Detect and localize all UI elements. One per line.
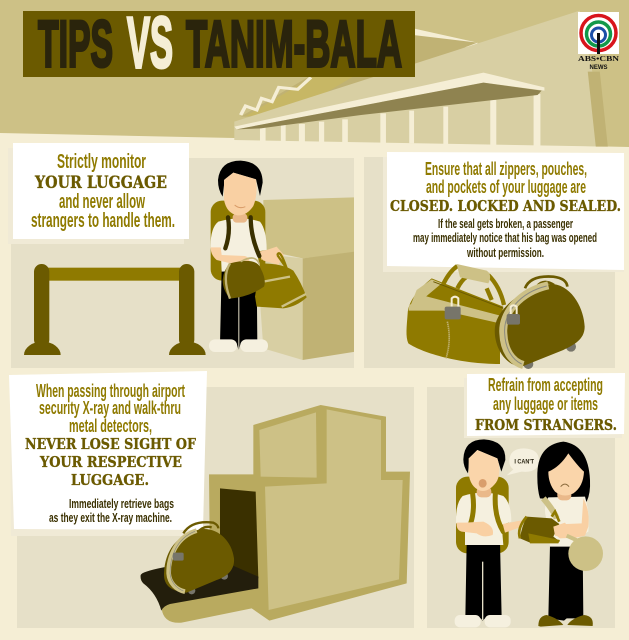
callout: zippers and pouches: without permission. [466, 245, 544, 260]
callout: monitor luggage: strangers to handle them. [31, 210, 175, 232]
traveller refusing [455, 439, 523, 627]
handbag [520, 517, 560, 543]
title banner: VS [127, 4, 173, 84]
callout: monitor luggage: YOUR LUGGAGE [34, 173, 167, 193]
suitcase on belt [164, 522, 234, 594]
callout: x-ray security: Immediately retrieve bags [69, 496, 174, 511]
round bag [223, 261, 265, 299]
callout: x-ray security: as they exit the X-ray machine. [49, 510, 172, 525]
title banner [23, 4, 415, 84]
callout: x-ray security: metal detectors, [69, 416, 152, 436]
duffel bag with padlock [406, 264, 504, 364]
conveyor belt [141, 560, 258, 611]
title banner: TANIM-BALA [186, 6, 402, 80]
round suitcase with padlock [495, 276, 585, 369]
panel: x-ray machine [17, 387, 414, 628]
ABS-CBN News logo [578, 12, 620, 71]
columns [260, 94, 540, 146]
shoulder bag [567, 536, 580, 542]
callout: monitor luggage [8, 143, 189, 244]
traveller woman with handbag [519, 442, 603, 627]
callout: x-ray security: NEVER LOSE SIGHT OF [25, 435, 196, 453]
roof zigzag [241, 77, 311, 115]
callout: x-ray security: YOUR RESPECTIVE [39, 453, 182, 471]
airport terminal illustration [234, 11, 608, 147]
callout: monitor luggage: Strictly monitor [57, 151, 146, 173]
title banner: TIPS [38, 6, 113, 80]
traveller with backpack [209, 161, 307, 352]
callout: x-ray security: security X-ray and walk-thru [39, 398, 181, 418]
duffel bag [262, 253, 287, 269]
panel: closed locked and sealed [364, 157, 615, 368]
panel: strangers [427, 387, 615, 628]
locked luggage illustration [406, 264, 585, 369]
header backdrop [0, 0, 629, 147]
stanchion barrier [24, 264, 206, 355]
callout: x-ray security: When passing through airport [36, 381, 185, 401]
speech bubble: I CAN'T [514, 459, 534, 465]
callout: refuse items from strangers [464, 373, 625, 438]
panel: monitor your luggage [11, 158, 355, 368]
x-ray scanner [141, 405, 410, 623]
callout: monitor luggage: and never allow [59, 191, 145, 213]
callout: x-ray security: LUGGAGE. [71, 471, 149, 489]
ABS-CBN News logo: ABS•CBN [578, 54, 620, 63]
stacked crates [257, 197, 355, 360]
speech bubble [507, 448, 539, 475]
callout: x-ray security [9, 371, 207, 536]
ABS-CBN News logo: NEWS [590, 65, 608, 71]
callout: zippers and pouches [383, 152, 624, 272]
